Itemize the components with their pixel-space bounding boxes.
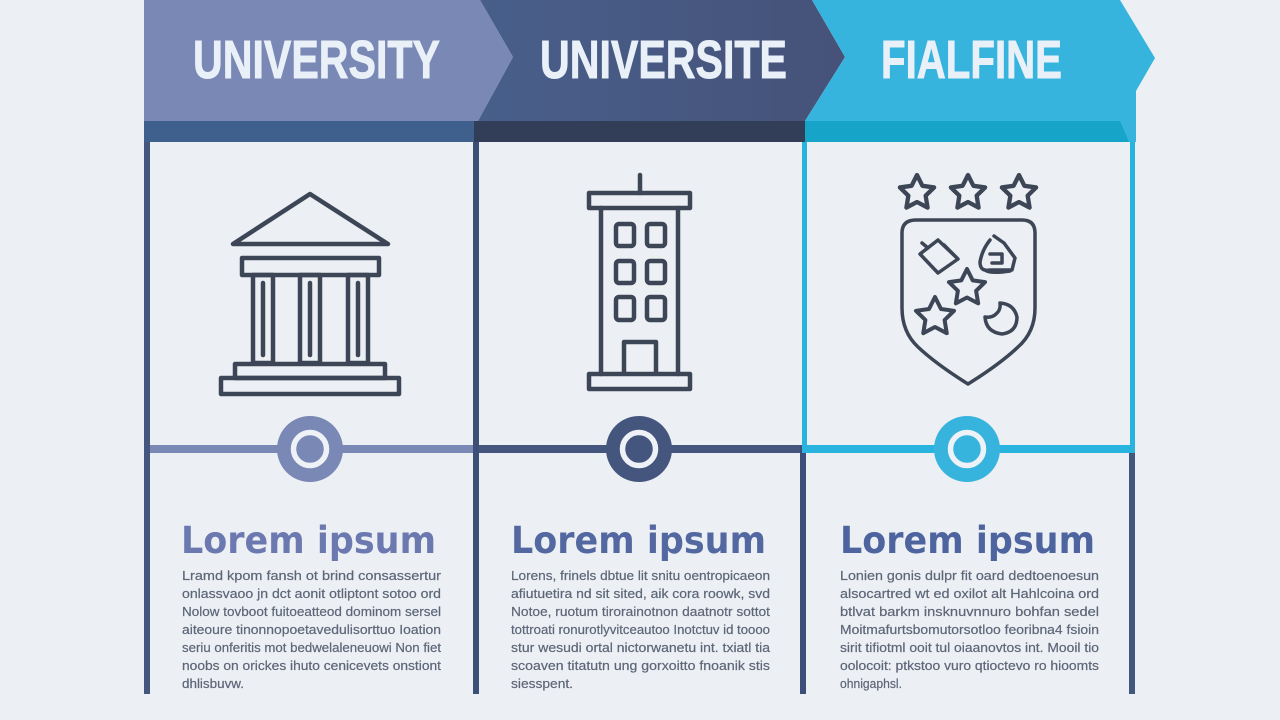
column 3 body text: Lonien gonis dulpr fit oard dedtoenoesun: [840, 569, 1099, 583]
column 2 body text: tottroati ronurotlyvitceautoo Inotctuv id toooo: [511, 623, 770, 637]
column 2 body text: scoaven titatutn ung gorxoitto fnoanik stis: [511, 659, 770, 673]
column 2: [473, 0, 845, 694]
column 2 body text: stur wesudi ortal nictorwanetu int. txiatl tia: [511, 641, 770, 655]
column 1 timeline marker: [150, 416, 473, 482]
column 1 left rule: [144, 142, 150, 694]
column 1: [144, 0, 513, 694]
column 3 body text: alsocartred wt ed oxilot alt Hahlcoina ord: [840, 587, 1099, 601]
column 1 body text: [182, 569, 442, 691]
column 3 heading: FIALFINE: [881, 30, 1062, 90]
column 3 timeline marker: [802, 416, 1135, 482]
column 2 subheading: Lorem ipsum: [511, 519, 766, 562]
column 2 body text: afiutuetira nd sit sited, aik cora roowk, svd: [511, 587, 770, 601]
column 1 heading: UNIVERSITY: [193, 30, 440, 90]
column 2 body text: siesspent.: [511, 677, 573, 691]
column 3 header arrow: [805, 0, 1155, 142]
column 2 header arrow: [474, 0, 845, 142]
column 1 body text: noobs on orickes ihuto cenicevets onstiont: [182, 659, 442, 673]
column 3 body text: [840, 569, 1099, 691]
column 3 highlighted frame: [802, 142, 1135, 449]
column 1 body text: dhlisbuvw.: [182, 677, 244, 691]
column 3 body text: btlvat barkm insknuvnnuro bohfan sedel: [840, 605, 1099, 619]
column 1 body text: aiteoure tinonnopoetavedulisorttuo Ioation: [182, 623, 441, 637]
column 1 header arrow: [144, 0, 513, 142]
column 1 body text: Lramd kpom fansh ot brind consassertur: [182, 569, 441, 583]
column 3 body text: sirit tifiotml ooit tul oiaanovtos int. Mooil tio: [840, 641, 1099, 655]
column 2 left rule: [473, 142, 479, 694]
column 3 lower rules: [800, 445, 1135, 694]
column 2 body text: [511, 569, 771, 691]
column 1 body text: onlassvaoo jn dct aonit otliptont sotoo ord: [182, 587, 441, 601]
column 2 body text: Lorens, frinels dbtue lit snitu oentropicaeon: [511, 569, 770, 583]
column 2 body text: Notoe, ruotum tirorainotnon daatnotr sottot: [511, 605, 771, 619]
column 1 subheading: Lorem ipsum: [181, 519, 436, 562]
icon: tower building: [589, 175, 690, 389]
icon: classical temple: [221, 194, 399, 394]
column 1 body text: Nolow tovboot fuitoeatteod dominom sersel: [182, 605, 441, 619]
column 3 subheading: Lorem ipsum: [840, 519, 1095, 562]
column 2 timeline marker: [479, 416, 800, 482]
column 1 body text: seriu onferitis mot bedwelaleneuowi Non fiet: [182, 641, 442, 655]
column 3 body text: oolocoit: ptkstoo vuro qtioctevo ro hioomts: [840, 659, 1099, 673]
column 3 body text: Moitmafurtsbomutorsotloo feoribna4 fsioin: [840, 623, 1099, 637]
icon: shield with stars: [900, 175, 1036, 384]
column 3: [800, 0, 1155, 694]
column 3 body text: ohnigaphsl.: [840, 677, 902, 691]
column 2 heading: UNIVERSITE: [540, 30, 787, 90]
